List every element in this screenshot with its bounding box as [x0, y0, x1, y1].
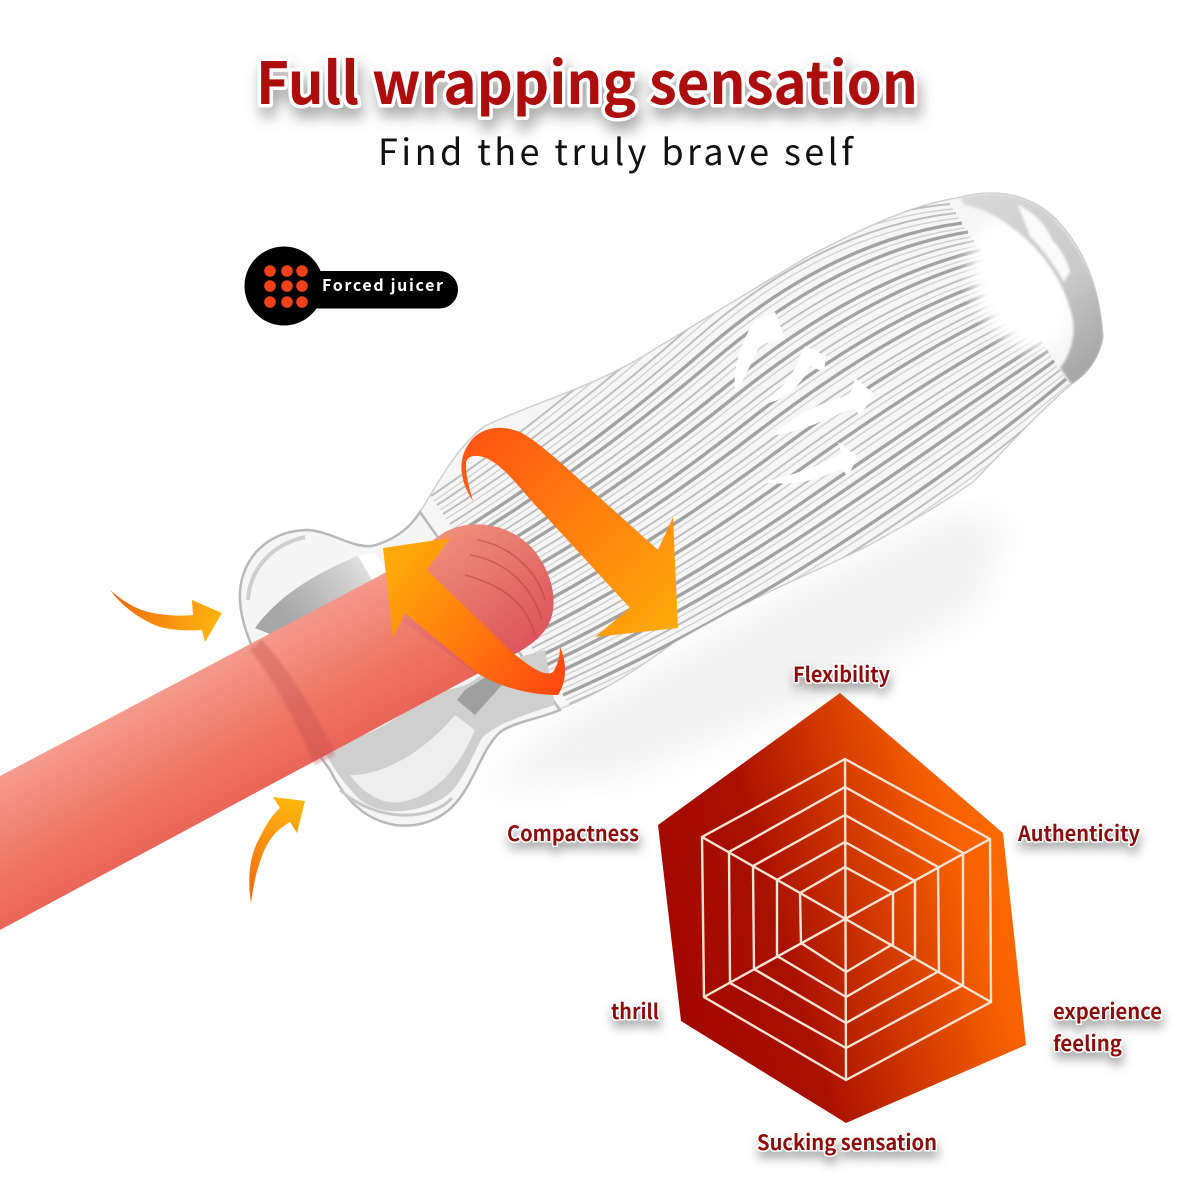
- arrow: left incoming: [110, 590, 222, 642]
- tube ribs: [431, 186, 1103, 709]
- radar value polygon: [658, 693, 1026, 1123]
- radar label: thrill: thrill: [611, 996, 659, 1026]
- badge: Forced juicer: [244, 246, 458, 326]
- radar label: Sucking sensation: Sucking sensation: [757, 1127, 937, 1157]
- product: ribbed clear tube: [420, 186, 1103, 760]
- radar label: experience feeling: experience: [1053, 996, 1162, 1026]
- translucent shaft graphic: [0, 524, 554, 930]
- arrow: lower incoming: [249, 797, 305, 903]
- radar label: Flexibility: Flexibility: [793, 659, 890, 689]
- radar label: Compactness: Compactness: [507, 818, 639, 848]
- subtitle: Find the truly brave self: [378, 124, 854, 176]
- soft floor shadow of product: [480, 512, 1010, 790]
- radar chart: [658, 693, 1026, 1123]
- radar label: experience feeling: [1053, 996, 1162, 1058]
- title: Full wrapping sensation: [256, 37, 918, 121]
- badge: Forced juicer: Forced juicer: [322, 272, 443, 296]
- product: flared opening: [240, 512, 560, 826]
- radar label: experience feeling: feeling: [1053, 1028, 1122, 1058]
- radar grid: [702, 759, 991, 1080]
- radar label: Authenticity: Authenticity: [1017, 818, 1140, 848]
- highlight: white swirl marks: [735, 312, 874, 483]
- end cap rim: [960, 193, 1103, 385]
- icon: nine red dots: [264, 265, 308, 308]
- arrow: counter-clockwise bottom arc: [383, 538, 565, 695]
- arrow: clockwise top arc: [461, 428, 678, 637]
